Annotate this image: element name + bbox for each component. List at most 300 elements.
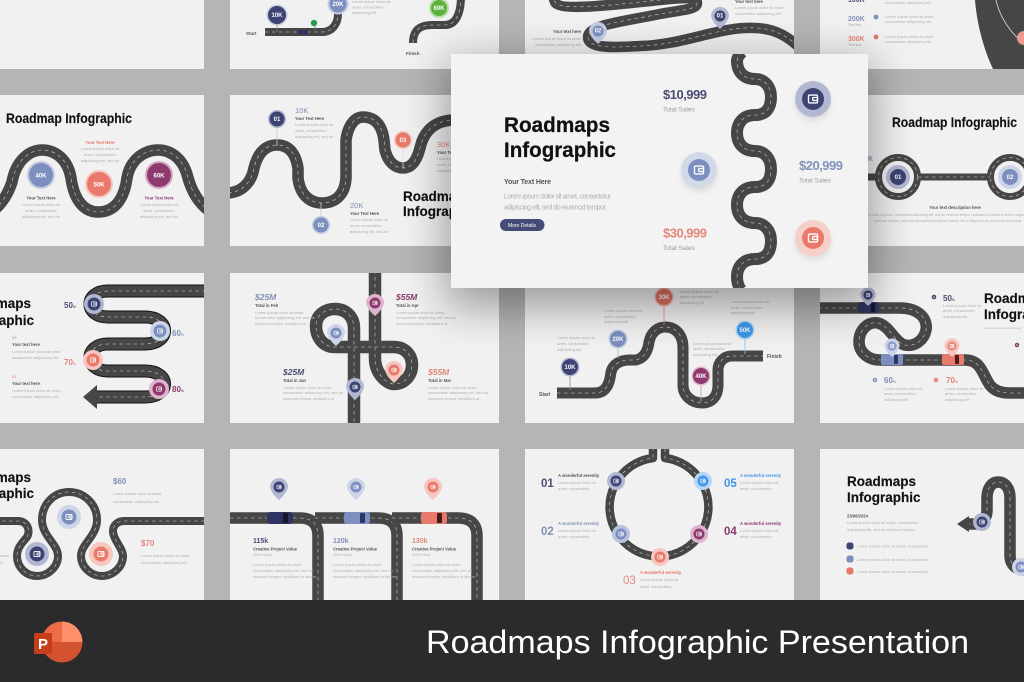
- road: [0, 492, 206, 576]
- text 20K: [350, 201, 389, 234]
- percent labels: 60%: [172, 329, 185, 338]
- text $70: $70: [141, 539, 155, 548]
- button: [500, 219, 544, 231]
- text 60K: Lorem ipsum dolor sit: [140, 202, 179, 207]
- text 60K: adipiscing elit, sed do: [140, 214, 179, 219]
- item 04: amet, consectetur: [740, 534, 772, 539]
- item 04: Lorem ipsum dolor sit: [740, 528, 779, 533]
- item 02: 02: [541, 526, 554, 538]
- car and tree: [298, 20, 317, 34]
- text Apr: Lorem ipsum dolor sit amet,: [396, 310, 445, 315]
- marker 10K: 10K: [271, 13, 283, 19]
- value 1: [663, 87, 707, 114]
- text 115k: consectetur adipiscing elit, sed do: [253, 568, 314, 573]
- road: [737, 52, 771, 290]
- dots: [874, 296, 1018, 382]
- road: [967, 482, 1024, 570]
- item 03: A wonderful serenity: [640, 570, 682, 575]
- text blocks: Lorem ipsum dolor sit: [693, 341, 732, 346]
- title: Infographic: [504, 139, 616, 162]
- text blocks: Lorem ipsum dolor sit amet: [533, 36, 582, 41]
- item 04: A wonderful serenity: [740, 521, 782, 526]
- item 01: Lorem ipsum dolor sit: [558, 480, 597, 485]
- road: [316, 270, 412, 425]
- text Apr: eiusmod tempor incididunt ut: [396, 321, 448, 326]
- text Feb: [254, 292, 316, 326]
- subheading: Your Text Here: [504, 179, 551, 186]
- text blocks: amet, consectetur: [680, 294, 712, 299]
- start and finish labels: Start: [539, 392, 551, 398]
- subtitle and text: [847, 514, 919, 532]
- arrow head: [957, 516, 969, 532]
- text 130k: 130k: [412, 538, 428, 545]
- item 01: 01: [541, 478, 554, 490]
- item 02: Lorem ipsum dolor sit: [558, 528, 597, 533]
- text lines: adipiscing elit: [943, 314, 968, 319]
- marker 01: 01: [895, 175, 902, 181]
- node 01: [607, 472, 625, 490]
- panel: featured slide: [451, 52, 868, 290]
- text lines: amet, consectetur: [945, 391, 977, 396]
- marker 02: [994, 161, 1024, 193]
- node 80: [149, 379, 169, 399]
- text 115k: Creative Project Value: [253, 546, 298, 552]
- text blocks: [557, 289, 770, 357]
- text 120k: eiusmod tempor incididunt ut labore: [333, 574, 397, 579]
- text Feb: Lorem ipsum dolor sit amet,: [255, 310, 304, 315]
- text Mar: consectetur adipiscing elit, sed do: [428, 390, 489, 395]
- node 04: [690, 525, 708, 543]
- text blocks: adipiscing elit: [680, 300, 705, 305]
- node navy: [25, 542, 49, 566]
- item 03: amet, consectetur: [640, 584, 672, 589]
- pin salmon: [944, 338, 960, 357]
- text 115k: Lorem ipsum dolor sit amet,: [253, 562, 302, 567]
- text Mar: [427, 367, 489, 401]
- node 02: [612, 525, 630, 543]
- text 130k: eiusmod tempor incididunt ut labore: [412, 574, 476, 579]
- icon: PowerPoint logo: [34, 621, 83, 664]
- node 05: [694, 472, 712, 490]
- text 130k: 360% Value: [412, 553, 431, 557]
- icon salmon: [795, 220, 831, 260]
- text 130k: Lorem ipsum dolor sit amet,: [412, 562, 461, 567]
- text lines: consectetur adipiscing elit: [885, 39, 932, 44]
- marker 60K: [429, 0, 449, 18]
- text blocks: 03: [12, 335, 17, 340]
- text 40K: amet, consectetur: [25, 208, 58, 213]
- text 20K: Lorem ipsum dolor sit: [350, 217, 389, 222]
- start and finish labels: [539, 354, 782, 398]
- text 20K: Your Text Here: [350, 211, 380, 216]
- item 01: amet, consectetur: [558, 486, 590, 491]
- pin 01: 01: [717, 14, 724, 20]
- panel: slide roadmap numbered: [230, 95, 451, 246]
- marker 60K: 60K: [433, 6, 445, 12]
- item 05: Lorem ipsum dolor sit: [740, 480, 779, 485]
- item 03: 03: [623, 575, 636, 587]
- text blocks: amet, consectetur: [731, 305, 763, 310]
- text blocks: Lorem ipsum dolor sit: [680, 289, 719, 294]
- node 03: [651, 548, 669, 566]
- text fragment: [0, 553, 10, 565]
- item 05: 05: [724, 478, 737, 490]
- bullet list: [846, 542, 929, 574]
- percent labels: 70%: [946, 376, 959, 385]
- road: [610, 447, 708, 556]
- text block: amet, consectetur: [352, 4, 384, 10]
- value 2: [799, 158, 843, 184]
- text 30K: adipiscing: [437, 168, 455, 173]
- percent labels: 50%: [943, 294, 956, 303]
- marker 10K: 10K: [564, 365, 576, 371]
- percent labels: 80%: [172, 385, 185, 394]
- marker 50K: [736, 320, 754, 354]
- text 120k: 360% Value: [333, 553, 352, 557]
- panel: slide arrow road with list: [820, 449, 1024, 600]
- car blue: [344, 512, 370, 524]
- panel: slide top road with finish: [230, 0, 499, 69]
- car blue: [881, 354, 903, 365]
- text Jan: consectetur adipiscing elit, sed do: [283, 390, 344, 395]
- text Mar: Total in Mar: [428, 378, 452, 383]
- text blocks: Lorem ipsum dolor sit: [604, 308, 643, 313]
- text block: adipiscing elit: [352, 10, 377, 15]
- marker 20K: 20K: [332, 2, 344, 8]
- footer bar: [0, 600, 1024, 682]
- text $70: Lorem ipsum dolor sit amet,: [141, 553, 190, 558]
- panel: slide loop road: [0, 449, 206, 600]
- text lines: consectetur adipiscing elit: [885, 0, 932, 5]
- road: [0, 150, 208, 212]
- text 120k: consectetur adipiscing elit, sed do: [333, 568, 394, 573]
- values: [848, 0, 865, 43]
- icon navy: [795, 81, 831, 121]
- text 40K: adipiscing elit, sed do: [22, 214, 61, 219]
- text 50K: adipiscing elit, sed do: [81, 158, 120, 163]
- text block right: consectetur adipiscing elit: [735, 11, 782, 16]
- item 02: A wonderful serenity: [558, 521, 600, 526]
- marker 10K: [560, 358, 580, 390]
- text lines: Lorem ipsum dolor sit: [943, 303, 982, 308]
- description: pulvinar sodales, quis natural mandatum ullamco laboris nisi ut aliquip ex ea commodo consequat: [875, 219, 1021, 223]
- pin blue: [347, 478, 365, 500]
- title: Roadmap Infographic: [6, 111, 132, 126]
- text Mar: $55M: [427, 367, 450, 377]
- text Feb: $25M: [254, 292, 277, 302]
- panel: slide top left empty: [0, 0, 204, 69]
- pin salmon: [424, 478, 442, 500]
- text blocks: Lorem ipsum dolor sit amet,: [12, 349, 61, 354]
- text Mar: Lorem ipsum dolor sit amet,: [428, 385, 477, 390]
- value 1: Total Sales: [663, 106, 696, 114]
- text $60: consectetur adipiscing elit: [113, 499, 160, 504]
- item 03: Lorem ipsum dolor sit: [640, 577, 679, 582]
- item 01: A wonderful serenity: [558, 473, 600, 478]
- text blocks: Your text here: [553, 29, 582, 34]
- text blocks: Lorem ipsum dolor sit: [557, 335, 596, 340]
- text 60K: Your Text Here: [144, 196, 174, 200]
- text Feb: eiusmod tempor incididunt ut: [255, 321, 307, 326]
- marker 50K: [85, 170, 113, 198]
- labels: Finish: [406, 51, 420, 56]
- text blocks: adipiscing elit: [693, 352, 718, 357]
- text blocks: consectetur adipiscing elit: [12, 355, 59, 360]
- car navy: [858, 302, 879, 313]
- title: Roadmaps: [847, 474, 916, 489]
- text lines: amet, consectetur: [943, 308, 975, 313]
- text lines: Lorem ipsum dolor sit amet: [885, 34, 934, 39]
- text Jan: Total in Jan: [283, 378, 306, 383]
- text 40K: [22, 196, 61, 219]
- labels: [246, 31, 420, 56]
- bullet list: Lorem ipsum dolor sit amet, consectetur: [857, 544, 929, 548]
- text blocks: Lorem ipsum dolor sit: [731, 299, 770, 304]
- text blocks: Lorem ipsum dolor sit amet,: [12, 388, 61, 393]
- panel: slide top right: Text line: [848, 43, 861, 47]
- text 20K: adipiscing elit, sed do: [350, 229, 389, 234]
- value 3: Total Sales: [663, 245, 696, 252]
- road: [860, 158, 1024, 196]
- text lines: Lorem ipsum dolor sit: [884, 386, 923, 391]
- text 50K: Your Text Here: [85, 140, 115, 145]
- pin plum: [366, 294, 384, 316]
- pin blue: [327, 324, 345, 346]
- road 3: [392, 518, 477, 602]
- pin navy: [270, 478, 288, 500]
- panel: slide road with cars: [818, 273, 1024, 423]
- text block right: Lorem ipsum dolor sit amet: [735, 5, 784, 10]
- text 50K: Lorem ipsum dolor sit: [81, 146, 120, 151]
- text 115k: [253, 538, 317, 579]
- text Mar: eiusmod tempor incididunt ut: [428, 396, 480, 401]
- text 120k: 120k: [333, 538, 349, 545]
- text blocks: [533, 29, 582, 47]
- marker 50K: 50K: [739, 328, 751, 334]
- title: Infographic: [847, 490, 921, 505]
- text 20K: amet, consectetur: [350, 223, 382, 228]
- value 2: $20,999: [799, 158, 843, 173]
- item 02: [541, 521, 600, 539]
- text Jan: Lorem ipsum dolor sit amet,: [283, 385, 332, 390]
- marker 40K: [692, 366, 710, 402]
- node blue: [1012, 558, 1024, 576]
- description: Your text description here: [929, 205, 981, 210]
- text blocks: Your text here: [12, 381, 41, 386]
- text lines: Lorem ipsum dolor sit: [945, 386, 984, 391]
- text blocks: amet, consectetur: [693, 346, 725, 351]
- subtitle and text: adipiscing elit, sed do eiusmod tempor: [847, 527, 916, 532]
- text lines: adipiscing elit: [884, 397, 909, 402]
- text 10K: Lorem ipsum dolor sit: [295, 122, 334, 127]
- car salmon: [942, 354, 964, 365]
- car navy: [267, 512, 293, 524]
- node salmon: [89, 542, 113, 566]
- marker 01: 01: [274, 117, 281, 123]
- text $70: consectetur adipiscing elit: [141, 560, 188, 565]
- paragraph: Lorem ipsum dolor sit amet, consectetur: [504, 194, 612, 200]
- pin salmon: [385, 361, 403, 383]
- title: [0, 296, 34, 328]
- text 130k: [412, 538, 476, 579]
- node navy: [973, 513, 991, 531]
- text 50K: amet, consectetur: [84, 152, 117, 157]
- item 05: A wonderful serenity: [740, 473, 782, 478]
- button: More Details: [508, 223, 537, 229]
- text 40K: Your Text Here: [26, 196, 56, 200]
- panel: slide crossing loops: [230, 270, 499, 425]
- text Jan: eiusmod tempor incididunt ut: [283, 396, 335, 401]
- title: Infographic: [403, 204, 477, 219]
- item 02: amet, consectetur: [558, 534, 590, 539]
- road dashes: [878, 158, 1024, 196]
- marker 01: [882, 161, 914, 193]
- paragraph: [504, 194, 612, 212]
- marker 30K: [654, 288, 674, 325]
- title: [404, 190, 451, 220]
- item 03: [623, 570, 682, 589]
- text 40K: Lorem ipsum dolor sit: [22, 202, 61, 207]
- title: Roadmaps: [403, 189, 472, 204]
- panel: slide top winding road: [525, 0, 794, 54]
- marker 30K: 30K: [658, 295, 670, 301]
- text 115k: 360% Value: [253, 553, 272, 557]
- item 01: [541, 473, 600, 491]
- text 120k: [333, 538, 397, 579]
- title: Roadmaps: [504, 114, 610, 137]
- text lines: adipiscing elit: [945, 397, 970, 402]
- text lines: Lorem ipsum dolor sit amet: [985, 326, 1021, 330]
- text lines: [885, 0, 934, 44]
- pin 02: [589, 22, 607, 44]
- pin navy: [860, 287, 876, 306]
- text 10K: 10K: [295, 106, 308, 115]
- panel: slide circle road: [525, 447, 794, 600]
- road: [557, 327, 763, 403]
- values: 200K: [848, 16, 865, 23]
- title: [984, 291, 1024, 322]
- icon: PowerPoint logo: P: [38, 636, 48, 653]
- text blocks: adipiscing elit: [604, 319, 629, 324]
- start and finish labels: Finish: [767, 354, 782, 360]
- road: [90, 291, 206, 397]
- footer title: Roadmaps Infographic Presentation: [426, 624, 969, 660]
- text 10K: adipiscing elit, sed do: [295, 134, 334, 139]
- dots: [874, 15, 878, 39]
- text lines: [884, 303, 1021, 402]
- text 120k: Lorem ipsum dolor sit amet,: [333, 562, 382, 567]
- pin navy: [346, 378, 364, 400]
- pin blue: [884, 338, 900, 357]
- text 30K: 30K: [437, 140, 450, 149]
- marker 02: 02: [318, 223, 325, 229]
- marker 60K: [145, 161, 173, 189]
- road 2: [315, 518, 397, 602]
- value 3: [663, 226, 707, 252]
- text blocks: amet, consectetur: [557, 341, 589, 346]
- text 50K: [81, 140, 120, 163]
- text 30K: Your Text Here: [437, 150, 467, 155]
- text blocks: amet, consectetur: [604, 314, 636, 319]
- marker 40K: 40K: [35, 174, 47, 180]
- text blocks: Your text here: [12, 342, 41, 347]
- large road curve: [975, 0, 1024, 69]
- text Apr: consectetur adipiscing elit, sed do: [396, 315, 457, 320]
- bullet list: Lorem ipsum dolor sit amet, consectetur: [857, 569, 929, 574]
- road: [228, 117, 455, 203]
- text Feb: consectetur adipiscing elit, sed do: [255, 315, 316, 320]
- marker 60K: 60K: [153, 174, 165, 180]
- pin 02: 02: [595, 28, 602, 34]
- item 05: amet, consectetur: [740, 486, 772, 491]
- icon blue: [681, 152, 717, 192]
- marker 20K: [608, 330, 628, 358]
- percent labels: 70%: [64, 358, 77, 367]
- value 2: Total Sales: [799, 178, 832, 184]
- subtitle and text: Lorem ipsum dolor sit amet, consectetur: [847, 520, 919, 525]
- marker 03: [394, 131, 412, 168]
- road 1: [230, 518, 318, 602]
- panel: slide start to finish road: [525, 273, 794, 423]
- text lines: amet, consectetur: [884, 391, 916, 396]
- marker 20K: 20K: [612, 337, 624, 343]
- panel: slide top right: [820, 0, 1024, 69]
- text 130k: consectetur adipiscing elit, sed do: [412, 568, 473, 573]
- text 10K: Your Text Here: [295, 116, 325, 121]
- road: [818, 308, 1024, 393]
- text blocks: [12, 335, 61, 399]
- node blue: [57, 505, 81, 529]
- text block: [352, 0, 391, 15]
- text Jan: $25M: [282, 367, 305, 377]
- text lines: Lorem ipsum dolor sit amet: [885, 14, 934, 19]
- text blocks: adipiscing elit: [557, 347, 582, 352]
- text $60: [113, 477, 162, 504]
- marker 40K: [27, 161, 55, 189]
- text block right: [735, 0, 784, 16]
- marker 20K: [328, 0, 348, 14]
- labels: Start: [246, 31, 257, 36]
- panel: slide three branch roads: [230, 449, 499, 602]
- value 3: $30,999: [663, 226, 707, 240]
- text 30K: [437, 142, 451, 173]
- percent labels: 50%: [64, 301, 77, 310]
- percent labels: [64, 301, 185, 394]
- featured slide shadow: [446, 62, 873, 307]
- text 60K: [140, 196, 179, 219]
- item 04: [724, 521, 782, 539]
- title: [847, 474, 921, 505]
- text $60: Lorem ipsum dolor sit amet,: [113, 491, 162, 496]
- panel: slide S-curve road: [0, 273, 206, 423]
- node 70: [83, 350, 103, 370]
- panel: slide top right: Text line: [848, 23, 861, 27]
- panel: slide roundabout road: [868, 95, 1024, 246]
- marker 01: [268, 110, 286, 146]
- text 30K: Lorem ipsum: [437, 156, 461, 161]
- text 115k: eiusmod tempor incididunt ut labore: [253, 574, 317, 579]
- text Feb: Total in Feb: [255, 303, 279, 308]
- item 04: 04: [724, 526, 737, 538]
- marker 02: [312, 203, 330, 234]
- text $70: [141, 539, 190, 565]
- percent labels: [884, 294, 959, 385]
- text 30K: amet, consec: [437, 162, 461, 167]
- text 10K: [295, 106, 334, 139]
- panel: slide roadmap arches: [0, 95, 208, 246]
- marker 03: 03: [400, 138, 407, 144]
- subtitle and text: 23/06/2024: [847, 514, 869, 518]
